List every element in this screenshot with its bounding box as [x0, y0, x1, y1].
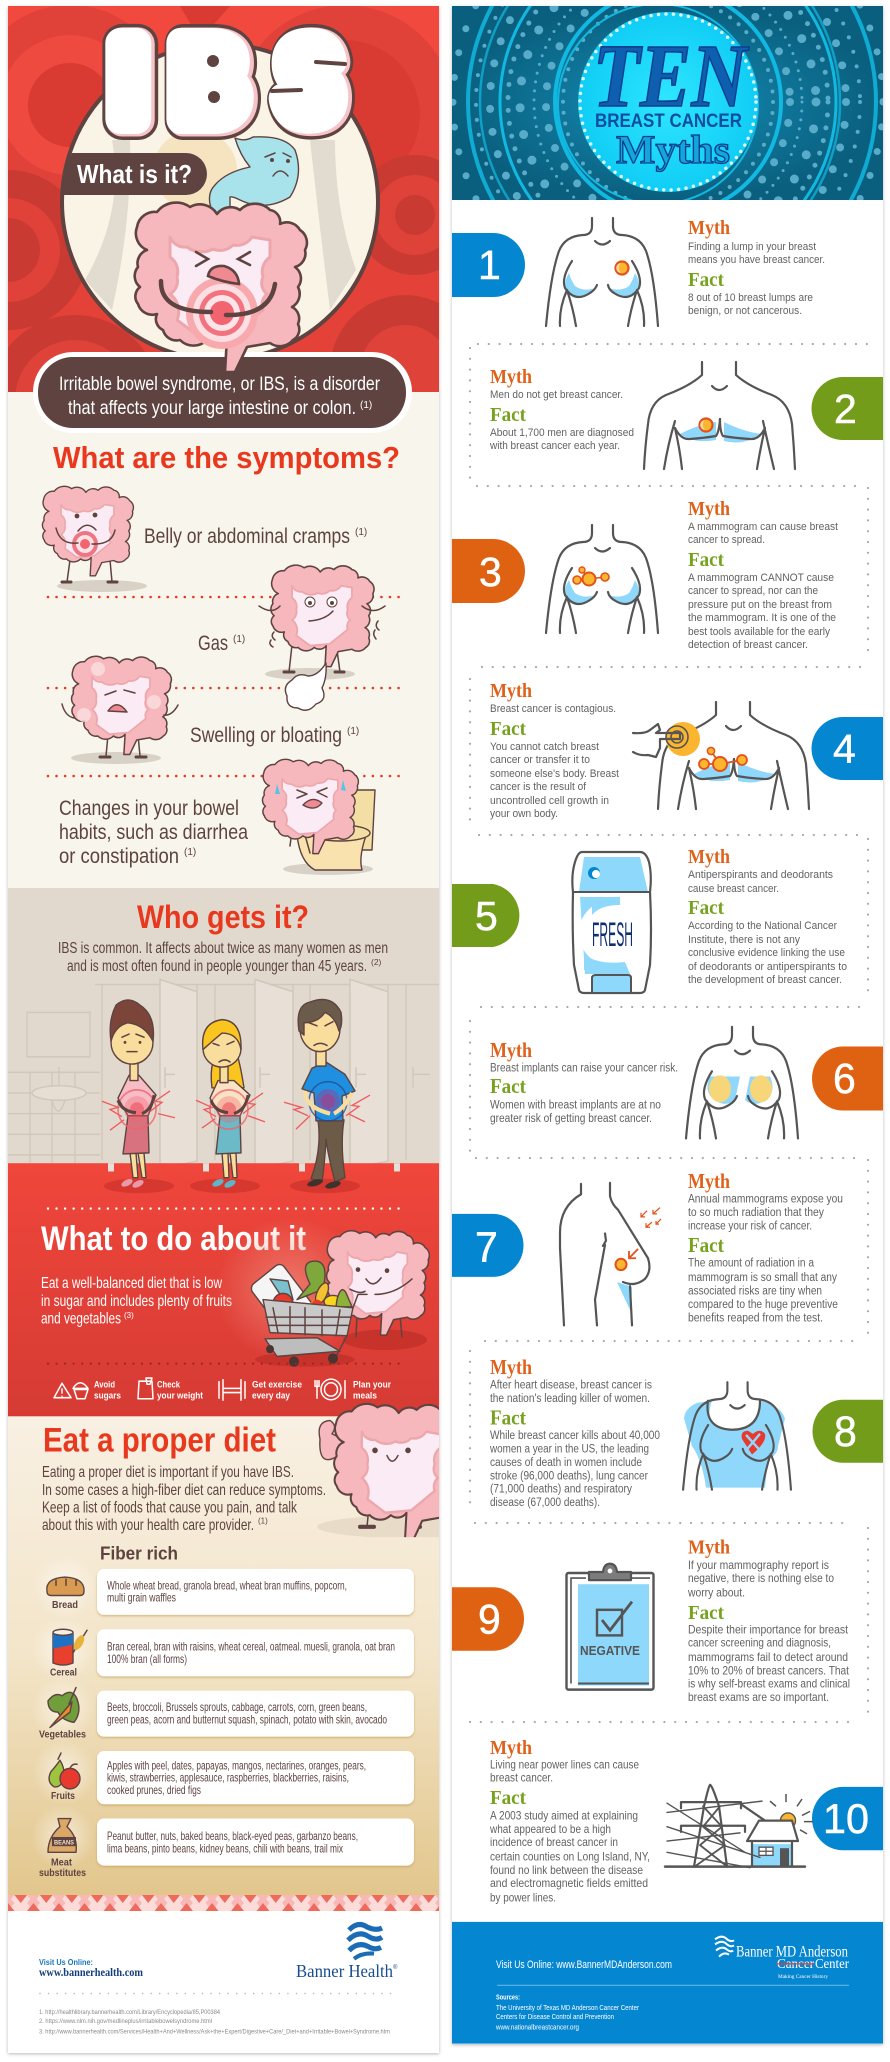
row: fruits: cooked prunes, dried figs: [107, 1783, 201, 1797]
text: myth 7: Annual mammograms expose you: [688, 1193, 843, 1206]
diet paragraph: about this with your health care provider.: [42, 1517, 254, 1534]
symptom: bowel habits: or constipation: [59, 845, 179, 868]
text: myth 1: Fact: [688, 269, 724, 291]
row: bread: [47, 1569, 414, 1615]
badge 5: [452, 884, 519, 947]
row: vegetables: green peas, acorn and butternut squash, spinach, potato with skin, avocado: [107, 1712, 387, 1726]
text: myth 4: Myth: [490, 680, 532, 702]
text: myth 9: worry about.: [687, 1587, 745, 1600]
heading: what to do: What to do about it: [41, 1221, 306, 1258]
text: myth 8: (71,000 deaths) and respiratory: [490, 1484, 632, 1496]
text: myth 7: The amount of radiation in a: [688, 1257, 814, 1270]
symptom: bloating: Swelling or bloating: [190, 724, 342, 747]
sources: [495, 1994, 640, 2031]
badge 8: [812, 1400, 883, 1463]
character: man: [284, 1000, 370, 1193]
text: myth 6: Fact: [490, 1076, 526, 1098]
section: who gets it: (2): [371, 957, 382, 967]
text: myth 3: detection of breast cancer.: [688, 639, 808, 651]
logo: Banner MD Anderson Cancer Center: Making Cancer History: [778, 1974, 828, 1980]
text: myth 9: cancer screening and diagnosis,: [688, 1638, 831, 1650]
action row: Plan your: [353, 1379, 391, 1389]
text: myth 9: Myth: [688, 1536, 730, 1559]
text: myth 10: A 2003 study aimed at explaining: [490, 1810, 638, 1823]
hero background with red rings: [8, 6, 439, 392]
text: myth 3: the mammogram. It is one of the: [688, 612, 836, 624]
illustration: touching male torso: [633, 702, 809, 809]
row: cereal: Bran cereal, bran with raisins, wheat cereal, oatmeal. muesli, granola, oat bran: [107, 1640, 395, 1654]
text: myth 8: While breast cancer kills about 40,000: [490, 1430, 660, 1442]
row: fruits: [49, 1751, 414, 1804]
myth 8: [489, 1357, 883, 1509]
section: who gets it: [8, 888, 439, 1166]
illustration: torso with heart: [683, 1382, 791, 1490]
text: myth 3: A mammogram CANNOT cause: [688, 572, 834, 584]
text: myth 7: increase your risk of cancer.: [688, 1220, 812, 1232]
text: myth 3: cancer to spread.: [688, 534, 765, 546]
action row: sugars: [94, 1391, 121, 1401]
row: vegetables: Beets, broccoli, Brussels sprouts, cabbage, carrots, corn, green beans,: [107, 1700, 367, 1714]
text: myth 4: You cannot catch breast: [490, 741, 600, 753]
myth 4: [490, 680, 883, 820]
text: myth 10: and electromagnetic fields emitted: [490, 1878, 648, 1890]
text: myth 1: Finding a lump in your breast: [688, 241, 817, 253]
text: myth 4: uncontrolled cell growth in: [490, 795, 609, 807]
row: bread: Whole wheat bread, granola bread, wheat bran muffins, popcorn,: [107, 1578, 347, 1592]
title: IBS: [113, 20, 345, 144]
heading: symptoms: What are the symptoms?: [53, 440, 400, 475]
myth 2: [489, 362, 883, 469]
text: myth 3: best tools available for the early: [688, 626, 830, 638]
text: myth 9: 10% to 20% of breast cancers. That: [688, 1665, 850, 1677]
text: myth 7: Myth: [688, 1171, 730, 1193]
text: myth 8: the nation's leading killer of women.: [490, 1393, 650, 1405]
myth 5: [452, 846, 847, 993]
badge 4: 4: [833, 726, 856, 772]
title: IBS: B: [176, 21, 247, 144]
badge 10: 10: [823, 1794, 869, 1842]
title: IBS: S: [281, 23, 342, 143]
food halos: [31, 1555, 97, 1870]
title: myths: Myths: [616, 127, 730, 172]
row: meat substitutes: BEANS: [54, 1840, 75, 1847]
row: meat substitutes: [39, 1819, 414, 1879]
section: what to do background: [8, 1163, 439, 1416]
diet paragraph: [42, 1464, 326, 1534]
text: myth 4: cancer is the result of: [490, 781, 587, 793]
action row: Check: [157, 1379, 180, 1389]
illustration: torso with lump: [546, 218, 658, 326]
text: myth 9: negative, there is nothing else to: [688, 1573, 834, 1585]
text: myth 10: what appeared to be a high: [489, 1824, 611, 1836]
illustration: torso with implants: [686, 1027, 798, 1138]
footer: Banner Health: Visit Us Online:: [39, 1957, 93, 1967]
logo: Banner Health: Banner Health: [296, 1961, 393, 1981]
action row: Get exercise: [252, 1379, 302, 1389]
text: myth 10: incidence of breast cancer in: [490, 1837, 618, 1849]
text: myth 5: conclusive evidence linking the use: [688, 947, 845, 959]
character: woman two: [190, 1020, 265, 1193]
text: myth 10: breast cancer.: [490, 1773, 553, 1785]
badge 1: [452, 233, 525, 297]
diet paragraph: Eating a proper diet is important if you have IBS.: [42, 1464, 294, 1481]
badge 10: [812, 1787, 883, 1850]
section: proper diet background: [8, 1416, 439, 1895]
text: myth 10: Myth: [490, 1737, 532, 1759]
diet paragraph: Keep a list of foods that cause you pain, and talk: [42, 1499, 297, 1516]
advice text: (3): [124, 1311, 134, 1320]
badge 3: 3: [479, 549, 502, 595]
badge 2: [812, 377, 883, 440]
text: myth 3: A mammogram can cause breast: [688, 521, 839, 533]
text: myth 9: breast exams are so important.: [688, 1692, 829, 1704]
intro description pill: Irritable bowel syndrome, or IBS, is a disorder: [59, 373, 380, 395]
text: myth 9: Fact: [688, 1602, 724, 1624]
diet paragraph: (1): [258, 1517, 268, 1526]
myths 6 to 8: [452, 1027, 883, 1509]
footer: Banner Health: www.bannerhealth.com: [39, 1966, 143, 1979]
hero: ten breast cancer myths: [452, 6, 883, 200]
text: myth 9: is why self-breast exams and clinical: [688, 1678, 850, 1691]
action row: Avoid: [94, 1379, 115, 1389]
action row: meals: [353, 1391, 377, 1401]
myth 1: [452, 217, 825, 326]
badge 3: [452, 539, 525, 603]
row: bread: Bread: [52, 1600, 78, 1611]
symptom: bowel habits: [59, 759, 375, 875]
text: myth 6: Women with breast implants are at no: [490, 1099, 661, 1112]
text: myth 4: Breast cancer is contagious.: [490, 703, 616, 715]
title: IBS: I: [115, 21, 146, 144]
text: myth 8: causes of death in women include: [490, 1457, 642, 1469]
text: myth 7: associated risks are tiny when: [688, 1285, 822, 1297]
myth 9: [452, 1536, 850, 1704]
text: myth 9: [687, 1536, 850, 1704]
myths 9 and 10 and footer: [452, 1536, 883, 2044]
symptom: gas: Gas: [198, 632, 228, 655]
text: myth 9: mammograms fail to detect around: [688, 1652, 848, 1664]
text: myth 4: cancer or transfer it to: [490, 754, 590, 766]
text: myth 4: [490, 680, 620, 820]
references: 3. http://www.bannerhealth.com/Services/Health+And+Wellness/Ask+the+Expert/Digestive+Care/_Diet+and+Irritable+Bowel+Syndrome.htm: [39, 2028, 390, 2035]
badge 1: 1: [478, 242, 501, 288]
text: myth 3: [688, 498, 839, 651]
text: myth 2: Myth: [490, 366, 532, 388]
text: myth 6: Myth: [490, 1040, 532, 1062]
references: 1. http://healthlibrary.bannerhealth.com/Library/Encyclopedia/85,P00384: [39, 2009, 220, 2016]
text: myth 2: [489, 366, 634, 452]
logo: Banner MD Anderson Cancer Center: Cancer: [777, 1956, 815, 1971]
middle sections: [8, 978, 439, 1538]
title: IBS: B: [173, 20, 245, 143]
bathroom background: [8, 979, 439, 1168]
what is it pill: [64, 153, 207, 195]
text: myth 8: women a year in the US, the leading: [489, 1443, 649, 1456]
advice text: and vegetables: [41, 1310, 121, 1327]
title: IBS: S: [279, 22, 339, 142]
text: myth 6: Breast implants can raise your cancer risk.: [490, 1062, 678, 1074]
references: 2. https://www.nlm.nih.gov/medlineplus/irritablebowelsyndrome.html: [39, 2018, 212, 2025]
text: myth 5: Institute, there is not any: [688, 934, 800, 946]
symptom: gas: [198, 565, 385, 710]
badge 5: 5: [475, 893, 498, 939]
symptom: bowel habits: Changes in your bowel: [59, 797, 239, 820]
myth 3: [452, 498, 839, 651]
hero circle: [62, 44, 378, 360]
text: myth 7: [688, 1171, 843, 1324]
symptom: bowel habits: (1): [184, 847, 196, 858]
text: myth 10: certain counties on Long Island, NY,: [490, 1851, 650, 1864]
diet paragraph: In some cases a high-fiber diet can reduce symptoms.: [42, 1482, 326, 1499]
text: myth 2: Fact: [490, 404, 526, 426]
intro description pill: that affects your large intestine or colon.: [68, 397, 356, 419]
action row: [54, 1378, 391, 1401]
text: myth 1: benign, or not cancerous.: [688, 305, 802, 317]
row: meat substitutes: lima beans, pinto beans, kidney beans, chili with beans, trail mix: [107, 1841, 343, 1855]
logo: Banner MD Anderson Cancer Center: Banner MD Anderson: [736, 1944, 848, 1961]
sources: Centers for Disease Control and Prevention: [496, 2013, 614, 2021]
illustration: strong colon: [317, 1402, 439, 1538]
illustration: negative clipboard: [566, 1564, 654, 1690]
myth 7: [452, 1171, 843, 1325]
hero colon in pain: [135, 203, 307, 372]
illustration: deodorant: [572, 852, 651, 993]
footer: Banner MD Anderson: [452, 1922, 883, 2044]
badge 6: [812, 1046, 883, 1111]
text: myth 10: [489, 1737, 650, 1904]
text: myth 6: greater risk of getting breast cancer.: [490, 1113, 652, 1125]
section: who gets it: IBS is common. It affects about twice as many women as men: [58, 940, 388, 957]
text: myth 4: Fact: [490, 718, 526, 740]
references: [39, 2009, 390, 2035]
row: vegetables: [39, 1688, 414, 1741]
title: TEN: TEN: [593, 27, 750, 126]
text: myth 2: About 1,700 men are diagnosed: [490, 427, 634, 439]
panel: IBS infographic: [0, 5, 503, 2053]
stomach character: [209, 137, 299, 213]
intro description pill: [33, 352, 412, 433]
heading: proper diet: Eat a proper diet: [43, 1421, 276, 1460]
text: myth 8: [489, 1357, 660, 1509]
bottom cream background: [8, 392, 439, 888]
symptom: bowel habits: habits, such as diarrhea: [59, 821, 248, 844]
text: myth 2: with breast cancer each year.: [489, 440, 620, 452]
illustration: male torso: [644, 362, 795, 469]
badge 7: 7: [475, 1223, 498, 1270]
footer: Banner MD Anderson: Visit Us Online: www.BannerMDAnderson.com: [496, 1959, 672, 1971]
text: myth 5: According to the National Cancer: [688, 920, 837, 932]
symptom: cramps: [42, 486, 367, 592]
text: myth 4: your own body.: [490, 808, 558, 820]
text: myth 8: Fact: [490, 1407, 526, 1430]
section: who gets it: and is most often found in people younger than 45 years.: [67, 958, 367, 975]
text: myth 4: someone else's body. Breast: [490, 768, 620, 780]
text: myth 5: of deodorants or antiperspirants to: [688, 961, 847, 973]
what is it pill: What is it?: [77, 159, 192, 189]
text: myth 5: Antiperspirants and deodorants: [688, 869, 833, 881]
logo: Banner MD Anderson Cancer Center: [715, 1937, 850, 1980]
action row: your weight: [157, 1391, 203, 1401]
sources: The University of Texas MD Anderson Cancer Center: [496, 2004, 640, 2012]
logo: Banner Health: ®: [393, 1964, 398, 1971]
symptom: cramps: Belly or abdominal cramps: [144, 525, 350, 548]
advice text: in sugar and includes plenty of fruits: [41, 1293, 232, 1310]
illustration: negative clipboard: NEGATIVE: [580, 1643, 640, 1658]
text: myth 5: the development of breast cancer.: [688, 974, 842, 986]
text: myth 3: Fact: [688, 549, 724, 571]
action row: every day: [252, 1391, 290, 1401]
text: myth 1: [688, 217, 825, 317]
logo: Banner MD Anderson Cancer Center: Center: [815, 1956, 850, 1971]
character: woman one: [102, 1000, 175, 1193]
row: fruits: Apples with peel, dates, papayas, mangos, nectarines, oranges, pears,: [107, 1758, 366, 1772]
illustration: power lines and house: [665, 1785, 813, 1868]
text: myth 1: Myth: [688, 217, 730, 239]
advice text: Eat a well-balanced diet that is low: [41, 1275, 222, 1292]
text: myth 1: means you have breast cancer.: [688, 254, 825, 266]
badge 7: [452, 1214, 523, 1277]
title: IBS: S: [281, 23, 342, 143]
text: myth 8: stroke (96,000 deaths), lung cancer: [490, 1470, 648, 1482]
symptom: gas: (1): [233, 634, 245, 645]
food list: [31, 1543, 414, 1879]
badge 8: 8: [834, 1408, 857, 1455]
title: breast cancer: BREAST CANCER: [595, 110, 742, 132]
text: myth 5: Fact: [688, 897, 724, 919]
panel: breast cancer myths: [452, 0, 883, 2044]
logo: Banner Health: [296, 1925, 398, 1981]
sources: Sources:: [496, 1994, 520, 2002]
text: myth 10: by power lines.: [490, 1892, 556, 1904]
text: myth 1: 8 out of 10 breast lumps are: [688, 292, 813, 304]
text: myth 10: Living near power lines can cause: [490, 1759, 639, 1771]
footer: Banner Health: [39, 1925, 398, 2035]
symptom: bloating: (1): [347, 726, 359, 737]
heading: fiber rich: Fiber rich: [100, 1543, 178, 1564]
text: myth 7: Fact: [688, 1235, 724, 1257]
gingham band: [8, 1895, 439, 1911]
symptom: cramps: (1): [355, 527, 367, 538]
text: myth 8: After heart disease, breast cancer is: [490, 1379, 652, 1391]
illustration: torso with spreading cells: [546, 525, 658, 633]
text: myth 9: Despite their importance for breast: [688, 1624, 849, 1636]
text: myth 10: found no link between the disease: [490, 1865, 643, 1877]
text: myth 5: Myth: [688, 846, 730, 868]
text: myth 7: mammogram is so small that any: [688, 1272, 837, 1284]
row: fruits: Fruits: [51, 1791, 75, 1802]
text: myth 7: to so much radiation that they: [688, 1207, 824, 1219]
text: myth 6: [490, 1040, 678, 1125]
title: IBS: I: [113, 20, 144, 143]
text: myth 8: disease (67,000 deaths).: [490, 1497, 600, 1509]
title: IBS: B: [176, 21, 247, 144]
row: cereal: [50, 1629, 414, 1678]
advice text: [41, 1275, 232, 1327]
dotted divider: [48, 1207, 402, 1210]
badge 4: [812, 717, 883, 780]
text: myth 3: cancer to spread, nor can the: [688, 585, 818, 597]
illustration: deodorant: FRESH: [592, 916, 633, 954]
text: myth 8: Myth: [490, 1357, 532, 1379]
intro description pill: (1): [360, 400, 372, 411]
text: myth 5: cause breast cancer.: [688, 883, 779, 895]
row: meat substitutes: Peanut butter, nuts, baked beans, black-eyed peas, garbanzo beans,: [107, 1829, 358, 1843]
title: IBS: I: [115, 21, 146, 144]
myth 6: [490, 1027, 883, 1138]
text: myth 7: compared to the huge preventive: [688, 1299, 838, 1311]
badge 9: 9: [478, 1595, 501, 1642]
sources: www.nationalbreastcancer.org: [495, 2023, 579, 2031]
row: vegetables: Vegetables: [39, 1730, 86, 1741]
badge 2: 2: [834, 386, 857, 432]
text: myth 5: [688, 846, 847, 986]
text: myth 10: Fact: [490, 1787, 526, 1809]
icon: action icons: [54, 1378, 345, 1401]
badge 6: 6: [833, 1054, 856, 1102]
badge 9: [452, 1587, 524, 1651]
text: myth 9: If your mammography report is: [688, 1560, 829, 1572]
row: fruits: kiwis, strawberries, applesauce, raspberries, blackberries, raisins,: [107, 1771, 349, 1785]
illustration: side profile: [560, 1183, 661, 1325]
illustration: colon with shopping cart: [215, 1217, 429, 1367]
text: myth 2: Men do not get breast cancer.: [490, 389, 623, 401]
symptom: bloating: [62, 656, 359, 764]
section: who gets it: Who gets it?: [137, 899, 309, 935]
row: meat substitutes: Meat: [51, 1858, 73, 1869]
row: bread: multi grain waffles: [107, 1590, 176, 1605]
row: cereal: Cereal: [50, 1667, 77, 1678]
row: meat substitutes: substitutes: [39, 1868, 86, 1879]
text: myth 7: benefits reaped from the test.: [688, 1312, 823, 1324]
text: myth 3: Myth: [688, 498, 730, 520]
text: myth 3: pressure put on the breast from: [688, 599, 832, 611]
myth 10: [489, 1737, 883, 1904]
row: cereal: 100% bran (all forms): [107, 1652, 187, 1666]
